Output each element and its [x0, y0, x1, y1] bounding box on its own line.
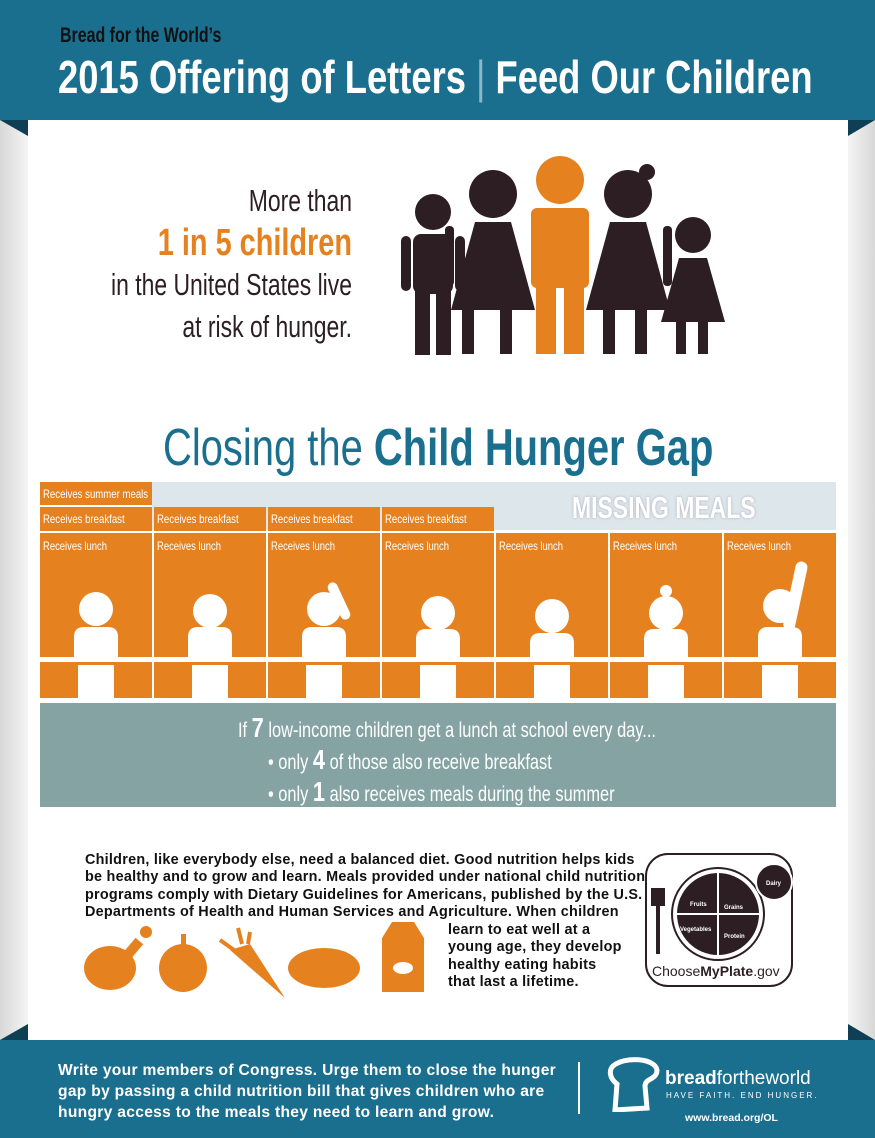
panel: meals grid: Receives breakfast [385, 512, 467, 526]
header [0, 0, 875, 120]
stat text: More than [249, 183, 352, 218]
panel: meals grid: Receives breakfast [157, 512, 239, 526]
stat text: at risk of hunger. [182, 309, 352, 344]
stat text [111, 183, 352, 344]
logo [608, 1057, 819, 1124]
footer [0, 1040, 875, 1138]
panel: meals grid: Receives lunch [499, 539, 563, 553]
text block: nutrition: Children, like everybody else, need a balanced diet. Good nutrition helps kids [85, 852, 635, 868]
icons: food [84, 922, 424, 998]
icon: family [401, 156, 725, 355]
panel: meals grid: Receives lunch [157, 539, 221, 553]
callout banner: • only 1 also receives meals during the summer [268, 776, 615, 807]
panel: meals grid: Receives lunch [613, 539, 677, 553]
callout banner: If 7 low-income children get a lunch at school every day... [238, 712, 656, 743]
panel: meals grid: Receives breakfast [271, 512, 353, 526]
footer: Write your members of Congress. Urge them to close the hunger [58, 1062, 556, 1079]
text block: nutrition [85, 852, 645, 920]
panel: meals grid: Receives lunch [43, 539, 107, 553]
text: young age, they develop [448, 939, 622, 955]
icon: MyPlate: Dairy [766, 881, 782, 887]
text: healthy eating habits [448, 957, 596, 973]
text block: nutrition: Departments of Health and Human Services and Agriculture. When children [85, 904, 619, 920]
logo: breadfortheworld [665, 1068, 811, 1089]
text: learn to eat well at a [448, 922, 590, 938]
side shading [0, 120, 28, 1040]
text: that last a lifetime. [448, 974, 579, 990]
logo: HAVE FAITH. END HUNGER. [666, 1091, 819, 1100]
panel: meals grid: MISSING MEALS [572, 490, 756, 525]
icon: MyPlate: Vegetables [680, 927, 712, 933]
icon: MyPlate: ChooseMyPlate.gov [652, 963, 780, 979]
text block: nutrition: be healthy and to grow and learn. Meals provided under national child nutrition [85, 869, 645, 885]
stat text: 1 in 5 children [158, 222, 352, 264]
callout banner [40, 703, 836, 807]
callout banner: • only 4 of those also receive breakfast [268, 744, 552, 775]
icon: MyPlate: Fruits [690, 902, 707, 908]
header: 2015 Offering of Letters | Feed Our Children [58, 51, 813, 103]
panel: meals grid: Receives breakfast [43, 512, 125, 526]
panel: meals grid: Receives lunch [385, 539, 449, 553]
text block: nutrition: programs comply with Dietary Guidelines for Americans, published by the U.S. [85, 887, 642, 903]
panel: meals grid [40, 482, 836, 698]
footer: hungry access to the meals they need to learn and grow. [58, 1104, 494, 1121]
header: Bread for the World’s [60, 24, 221, 47]
heading: Closing the Child Hunger Gap [163, 419, 713, 477]
panel: meals grid: Receives lunch [271, 539, 335, 553]
panel: meals grid: Receives lunch [727, 539, 791, 553]
logo: www.bread.org/OL [685, 1112, 778, 1124]
panel: meals grid: Receives summer meals [43, 487, 148, 501]
stat text: in the United States live [111, 267, 352, 302]
icon: MyPlate: Grains [724, 905, 744, 911]
footer: gap by passing a child nutrition bill that gives children who are [58, 1083, 545, 1100]
icon: MyPlate: Protein [724, 934, 745, 940]
icon: MyPlate [645, 853, 793, 987]
